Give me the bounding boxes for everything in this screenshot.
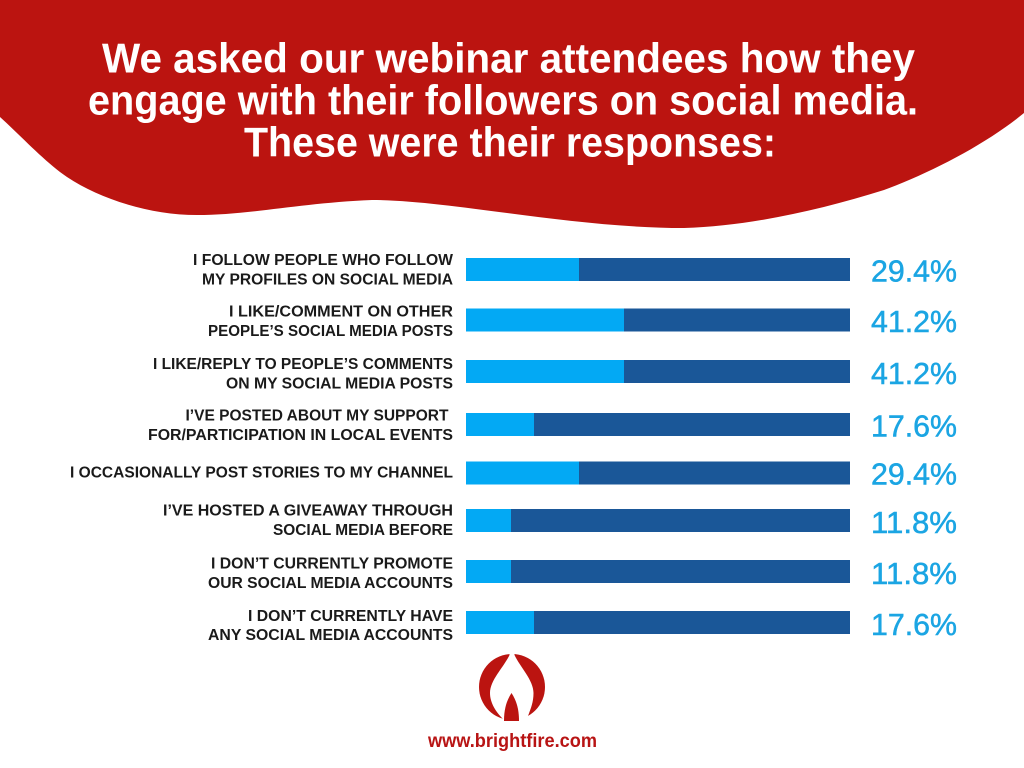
row 6: giveaway: SOCIAL MEDIA BEFORE <box>273 522 453 539</box>
row 4: local events: I’VE POSTED ABOUT MY SUPPORT <box>186 408 449 424</box>
row 2: like/comment: 41.2% <box>871 305 957 339</box>
row 7: don't promote: I DON’T CURRENTLY PROMOTE <box>211 556 453 572</box>
row 5: stories: 29.4% <box>871 458 957 492</box>
website url: www.brightfire.com <box>427 730 597 752</box>
row 1: follow people <box>193 252 957 288</box>
row 5: stories: I OCCASIONALLY POST STORIES TO MY CHANNEL <box>70 464 453 482</box>
row 1: follow people: MY PROFILES ON SOCIAL MEDIA <box>202 272 453 288</box>
row 5: stories <box>70 458 957 492</box>
title <box>88 34 918 166</box>
title: engage with their followers on social media. <box>88 76 918 124</box>
row 4: local events: 17.6% <box>871 410 957 444</box>
row 8: no accounts: I DON’T CURRENTLY HAVE <box>248 608 453 625</box>
row 8: no accounts: 17.6% <box>871 608 957 642</box>
row 2: like/comment: I LIKE/COMMENT ON OTHER <box>229 304 453 320</box>
row 7: don't promote: OUR SOCIAL MEDIA ACCOUNTS <box>208 575 453 592</box>
red header wave <box>0 0 1024 228</box>
title: We asked our webinar attendees how they <box>102 34 916 82</box>
row 8: no accounts <box>208 608 957 644</box>
row 7: don't promote: 11.8% <box>871 557 957 591</box>
row 3: like/reply: ON MY SOCIAL MEDIA POSTS <box>226 376 453 392</box>
row 6: giveaway: I’VE HOSTED A GIVEAWAY THROUGH <box>163 502 453 520</box>
row 4: local events <box>148 408 957 444</box>
row 3: like/reply: I LIKE/REPLY TO PEOPLE’S COMMENTS <box>153 356 453 373</box>
row 3: like/reply: 41.2% <box>871 357 957 391</box>
row 1: follow people: 29.4% <box>871 254 957 288</box>
icon: BrightFire flame logo <box>479 650 545 723</box>
row 7: don't promote <box>208 556 957 592</box>
row 1: follow people: I FOLLOW PEOPLE WHO FOLLOW <box>193 252 453 269</box>
row 2: like/comment: PEOPLE’S SOCIAL MEDIA POSTS <box>208 323 453 340</box>
row 2: like/comment <box>208 304 957 340</box>
row 8: no accounts: ANY SOCIAL MEDIA ACCOUNTS <box>208 627 453 644</box>
row 6: giveaway <box>163 502 957 540</box>
row 6: giveaway: 11.8% <box>871 506 957 540</box>
row 4: local events: FOR/PARTICIPATION IN LOCAL EVENTS <box>148 427 453 444</box>
row 3: like/reply <box>153 356 957 392</box>
title: These were their responses: <box>244 118 776 166</box>
